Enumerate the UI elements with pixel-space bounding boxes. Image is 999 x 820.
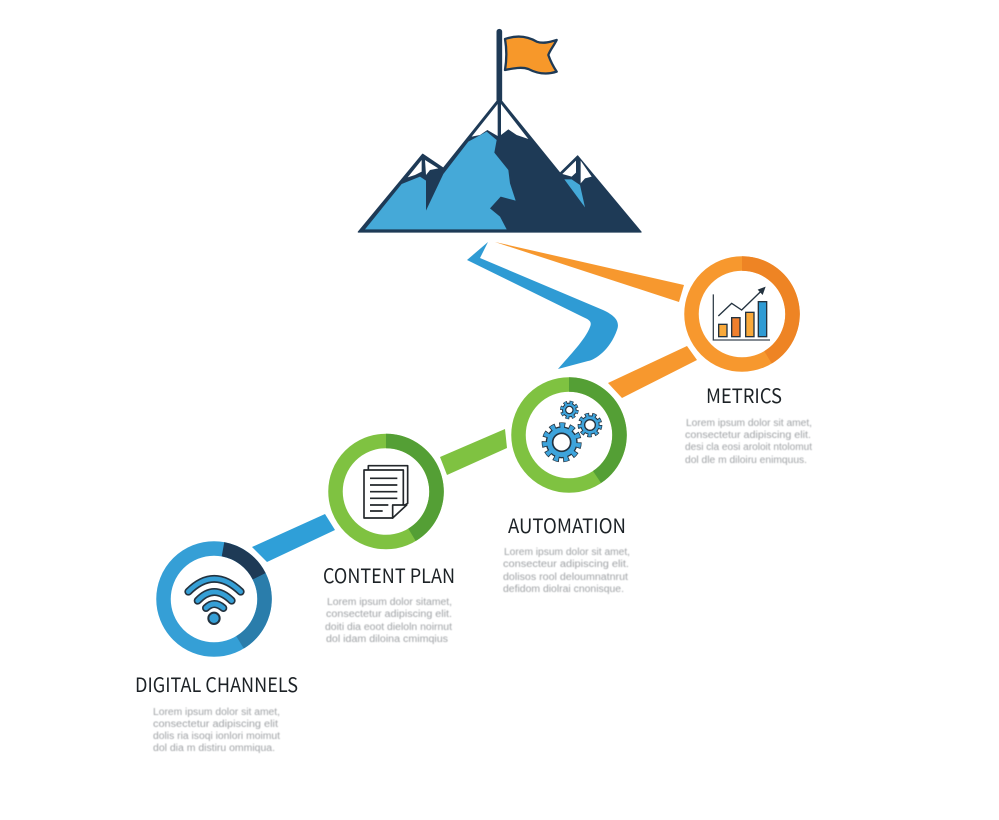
icon: bar chart with rising arrow (713, 287, 770, 340)
body text (503, 547, 630, 595)
step 2: content plan (323, 441, 455, 645)
body text: doiti dia eoot dieloln noirnut (325, 622, 452, 633)
body text (685, 418, 812, 466)
body text: Lorem ipsum dolor sit amet, (153, 707, 280, 718)
step 3: automation (503, 384, 630, 595)
connector: blue (252, 514, 335, 562)
body text: dolis ria isoqi ionlori moimut (153, 731, 280, 742)
body text (153, 707, 280, 754)
body text: dol dle m diloiru enimquus. (685, 455, 807, 466)
connector: green (440, 429, 507, 475)
ring (164, 548, 265, 650)
icon: document (364, 466, 408, 518)
step 4: metrics (685, 264, 812, 466)
heading: AUTOMATION (508, 510, 626, 539)
ring (692, 264, 793, 364)
ring (336, 441, 437, 542)
body text: Lorem ipsum dolor sit amet, (686, 418, 812, 429)
heading: CONTENT PLAN (323, 560, 455, 589)
step 1: digital channels (135, 548, 298, 754)
body text: consectetur adipiscing elit (153, 719, 278, 730)
icon: wifi (188, 579, 241, 624)
winding path: blue (467, 242, 618, 369)
flag (505, 36, 557, 73)
body text: defidom diolrai cnonisque. (503, 584, 624, 595)
body text: Lorem ipsum dolor sit amet, (504, 547, 630, 558)
mountain silhouette (358, 98, 641, 232)
winding path: orange top (495, 242, 684, 302)
body text: dol dia m distiru ommiqua. (153, 743, 275, 754)
flag pole (491, 32, 508, 100)
body text: consectetur adipiscing elit. (685, 430, 811, 441)
heading: METRICS (706, 380, 782, 409)
blue wedge on right peak (564, 179, 585, 207)
mountain sunlit face (365, 132, 516, 229)
body text: desi cla eosi aroloit ntolomut (685, 442, 812, 453)
connector: orange (608, 346, 697, 398)
body text: dolisos rool deloumnatnrut (503, 572, 628, 583)
heading: DIGITAL CHANNELS (135, 669, 298, 698)
body text: consectetur adipiscing elit. (326, 609, 452, 620)
body text: dol idam diloina cmimqius (326, 634, 448, 645)
body text (325, 597, 452, 645)
snow caps (408, 104, 592, 183)
ring (518, 384, 620, 486)
body text: consecteur adipiscing elit. (503, 559, 629, 570)
icon: gears (545, 402, 600, 459)
icon: mountain with flag (358, 32, 641, 232)
body text: Lorem ipsum dolor sitamet, (327, 597, 452, 608)
